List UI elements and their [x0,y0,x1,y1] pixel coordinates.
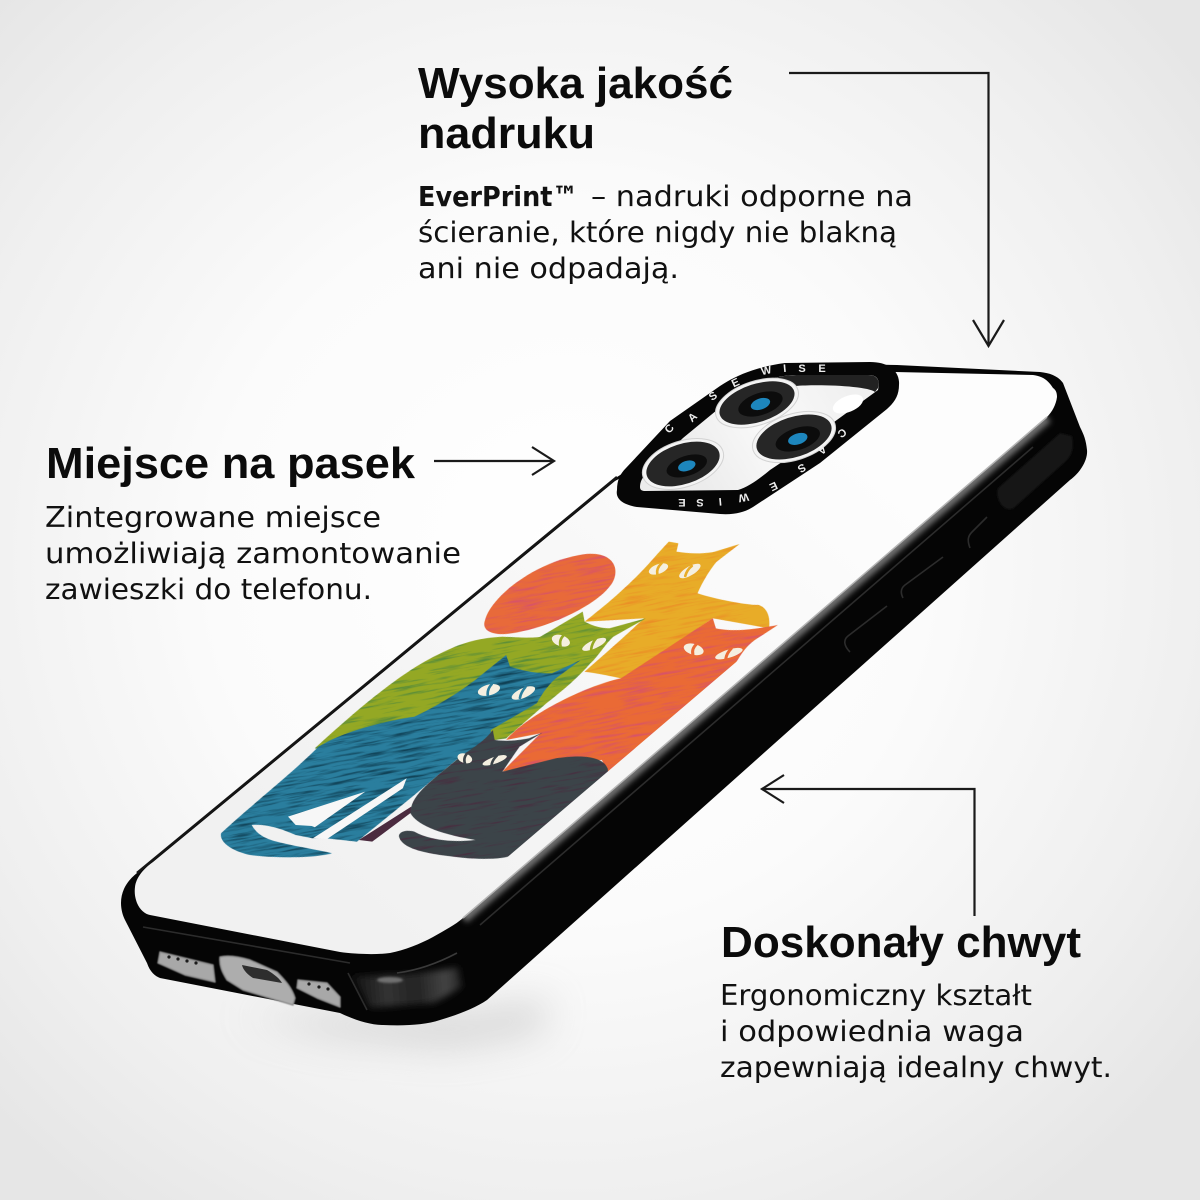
rim highlight [463,417,1047,918]
callout: Doskonały chwyt [720,918,1112,1084]
lens left [636,429,730,499]
callout: Wysoka jakość nadruku [418,59,913,285]
case gloss corner [352,967,462,1008]
heading: Wysoka jakość [418,59,733,108]
ring text: I [718,495,722,507]
opening shadow [775,375,879,392]
arrow: top callout to case [789,73,1004,346]
ring text: I [783,363,787,375]
text block: Ergonomiczny kształt [720,979,1032,1012]
heading [418,59,733,158]
camera ring [617,362,899,514]
orange cat [502,618,778,772]
text block: umożliwiają zamontowanie [45,537,461,570]
face [135,372,1057,954]
right speaker [297,980,340,1007]
ring text: S [795,461,808,475]
ring text: W [737,490,750,504]
text block: ani nie odpadają. [418,252,679,285]
ring text: C [835,425,848,440]
ring text: S [707,390,720,404]
text block: – nadruki odporne na [591,180,913,213]
gloss highlight [377,977,403,983]
ring text: A [686,411,700,425]
lens top [709,369,805,437]
left edge line [137,477,617,873]
ring text [663,363,848,508]
ring text: E [730,376,742,390]
text block: ścieranie, które nigdy nie blakną [418,216,897,249]
phone shadow [240,1000,550,1045]
ring text: S [696,496,704,508]
lens right [746,402,842,472]
heading: Miejsce na pasek [46,439,416,488]
text block [720,979,1112,1084]
text block [418,180,913,285]
ring text: W [760,364,773,378]
camera opening [640,375,879,491]
heading: Doskonały chwyt [721,918,1081,967]
rim shading [463,417,1047,918]
ring text: E [818,363,826,375]
text block: EverPrint™ [418,180,578,213]
camera island [617,362,899,514]
callout: Miejsce na pasek [45,439,461,606]
case body [121,363,1087,1025]
ring text: S [798,363,806,375]
text block: Zintegrowane miejsce [45,501,381,534]
black cat [398,730,608,860]
yellow cat [584,541,770,678]
text block: zawieszki do telefonu. [45,573,372,606]
maroon shadow leg [359,807,412,842]
text block [45,501,461,606]
ring text: C [663,422,677,436]
text block: zapewniają idealny chwyt. [720,1051,1112,1084]
phone case [121,362,1087,1025]
ring text: E [767,479,779,493]
left speaker [158,952,215,982]
green cat [314,612,646,749]
blue cat [220,655,581,858]
side groove and buttons [143,447,1033,1010]
cat eyes [456,561,744,768]
arrow: grip [762,775,974,916]
cat artwork [220,541,778,860]
heading: nadruku [418,109,595,158]
ring text: E [678,496,686,508]
ring text: A [815,442,828,457]
flash [830,391,866,417]
charging port [220,956,295,1005]
gaps between legs [288,792,365,827]
side switch bump [997,433,1073,509]
text block: i odpowiednia waga [720,1015,1024,1048]
sun [484,554,616,634]
arrow: strap slot [434,447,554,475]
